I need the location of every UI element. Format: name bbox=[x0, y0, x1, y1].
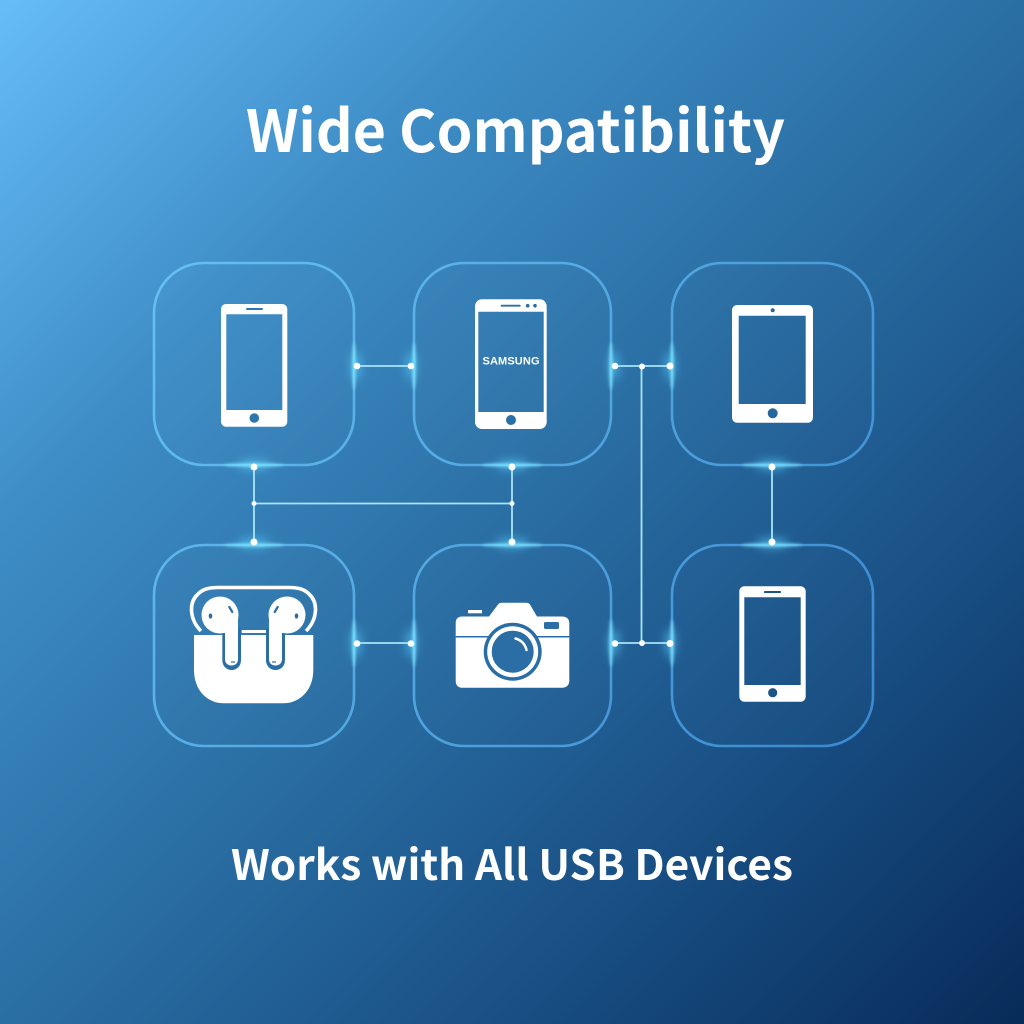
right earbud bbox=[266, 596, 306, 670]
left earbud bbox=[202, 596, 241, 670]
panel: tablet tile bbox=[672, 263, 873, 465]
panel: second phone tile bbox=[672, 545, 873, 746]
connector wide glow bbox=[238, 352, 788, 657]
subtitle: Works with All USB Devices bbox=[231, 832, 793, 893]
label: Samsung wordmark: SAMSUNG bbox=[482, 356, 540, 368]
icon: camera bbox=[456, 603, 569, 688]
icon: Samsung phone bbox=[475, 299, 547, 429]
icon: phone bbox=[221, 304, 287, 427]
panel: camera tile bbox=[414, 545, 611, 746]
case lid bbox=[192, 588, 315, 631]
icon: earbuds in case bbox=[192, 588, 315, 703]
connector lines bbox=[254, 366, 772, 643]
panel: earbuds tile bbox=[154, 545, 354, 746]
panel: device tiles bbox=[154, 263, 873, 746]
case body bbox=[194, 635, 313, 703]
panel: Samsung phone tile bbox=[414, 263, 611, 465]
panel: phone tile bbox=[154, 263, 354, 465]
bright tile edge highlights bbox=[224, 342, 802, 667]
connector nodes bbox=[250, 362, 776, 647]
title: Wide Compatibility bbox=[246, 85, 785, 169]
icon: tablet bbox=[732, 305, 813, 423]
icon: phone two bbox=[739, 586, 806, 702]
case hinge bbox=[242, 630, 266, 633]
